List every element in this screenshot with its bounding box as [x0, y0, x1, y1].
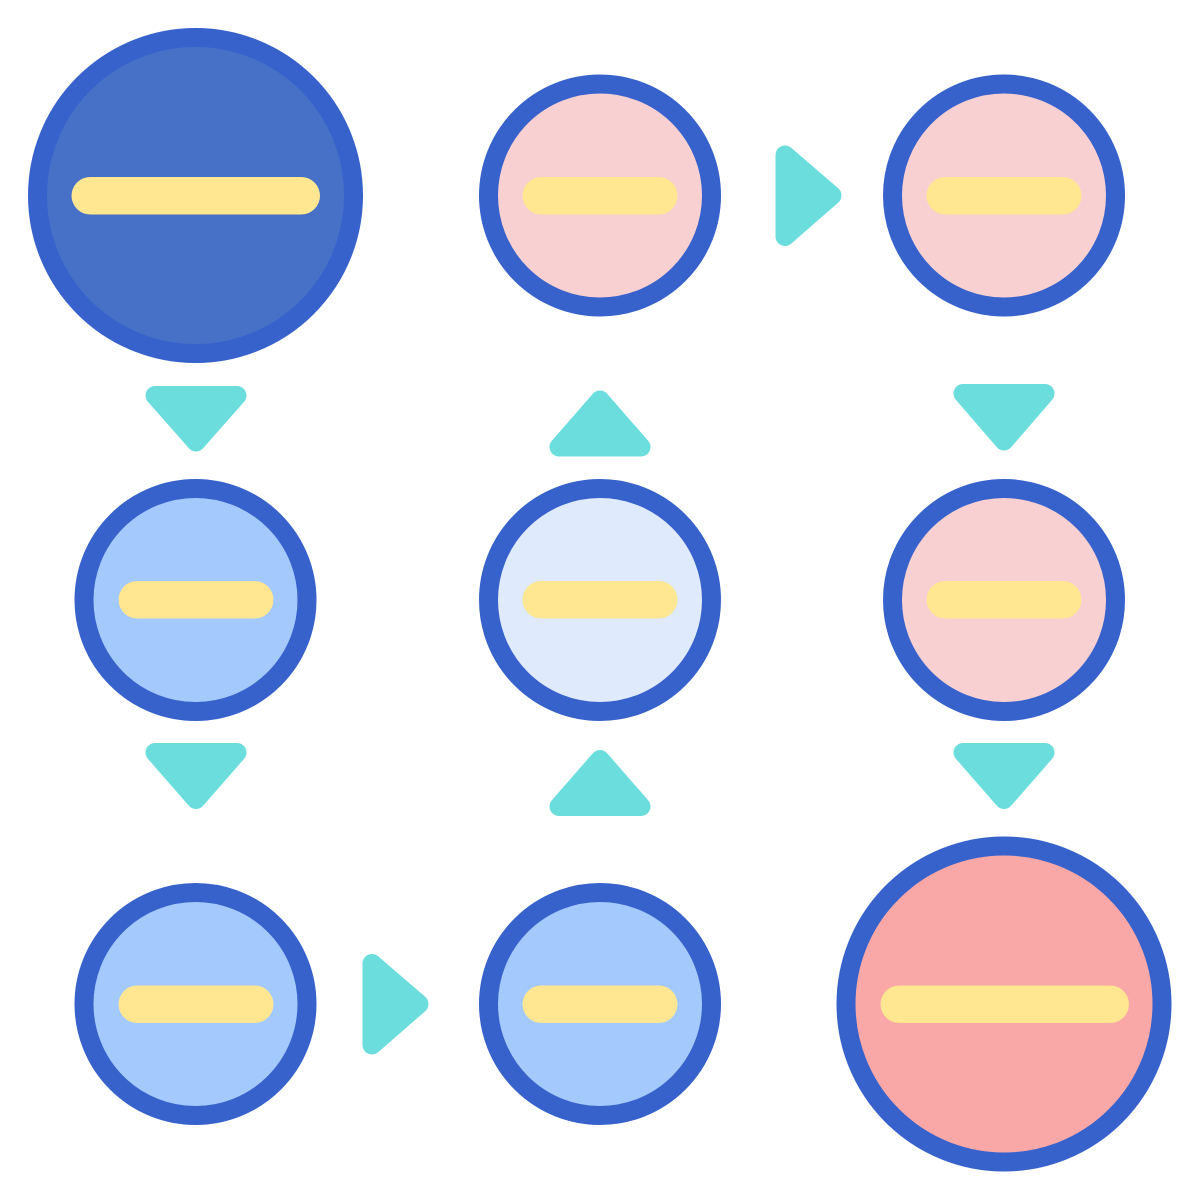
arrow: down right column lower: [963, 752, 1045, 800]
arrow: up from bottom middle: [559, 760, 641, 806]
node: pink top middle: [488, 84, 712, 307]
node: large dark blue start: [38, 38, 354, 354]
arrow: up from center: [559, 400, 641, 447]
node: blue bottom left: [84, 892, 307, 1116]
node: blue middle left: [84, 488, 307, 712]
arrow: right top row: [785, 155, 832, 236]
arrow: down left column: [155, 752, 237, 800]
node: pink middle right: [892, 488, 1116, 712]
arrow: right bottom row: [372, 964, 419, 1045]
node: pink top right: [892, 84, 1116, 307]
node: pale blue center: [488, 488, 712, 712]
node: large red end: [846, 846, 1162, 1162]
arrow: down right column upper: [963, 394, 1045, 441]
arrow: down from start: [155, 396, 237, 442]
node: blue bottom middle: [488, 892, 712, 1116]
